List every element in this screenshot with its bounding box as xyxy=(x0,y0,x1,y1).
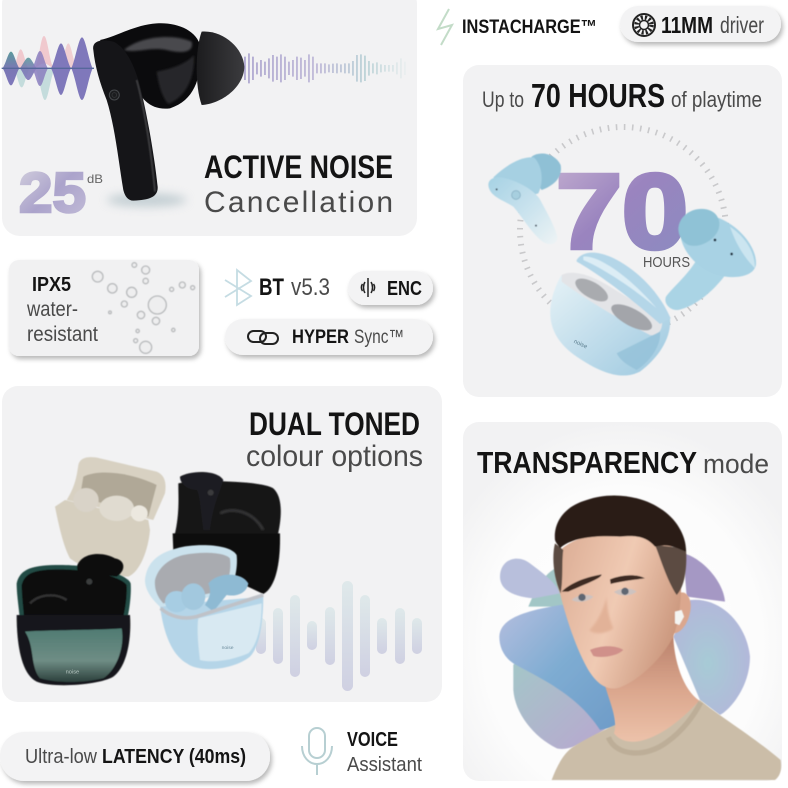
dial ticks xyxy=(520,127,726,333)
eyes xyxy=(572,588,637,602)
icon: driver xyxy=(633,14,655,36)
panel: transparency mode xyxy=(463,422,782,781)
subheading: cancellation: Cancellation xyxy=(204,186,393,219)
icon: transparent blue case xyxy=(550,253,671,376)
icon: right blue earbud xyxy=(665,209,756,310)
pill: ultra-low latency: Ultra-low xyxy=(25,746,97,768)
feature: bluetooth: v5.3 xyxy=(291,274,330,301)
feature: bluetooth xyxy=(225,270,330,305)
heading: 25 dB: 25 xyxy=(19,161,86,225)
side fade hair xyxy=(553,543,686,595)
feature: instacharge xyxy=(438,9,597,45)
sweater xyxy=(552,700,781,780)
pill: enc: ENC xyxy=(387,278,422,300)
icon: microphone xyxy=(302,728,332,775)
pill: ultra-low latency: LATENCY (40ms) xyxy=(102,746,246,768)
panel: 70 hours playtime xyxy=(463,65,782,397)
waveform: filtered sound xyxy=(245,53,405,83)
waveform: incoming noise xyxy=(2,36,94,100)
feature: instacharge: INSTACHARGE™ xyxy=(462,17,597,38)
heading: transparency mode: mode xyxy=(703,449,769,479)
icon: bluetooth xyxy=(225,270,251,305)
heading: up to 70 hours of playtime xyxy=(482,77,762,114)
feature: voice assistant: VOICE xyxy=(347,729,398,751)
big number 70: 70 xyxy=(556,153,688,271)
card: ipx5 water resistant: resistant xyxy=(27,323,98,346)
face xyxy=(554,532,681,688)
feature: voice assistant: Assistant xyxy=(347,754,422,776)
icon: black case xyxy=(173,472,281,594)
neck xyxy=(603,633,699,742)
pill: 11mm driver: 11MM xyxy=(661,12,713,38)
icon: beige case xyxy=(55,457,166,577)
ear xyxy=(673,592,691,633)
feature: bluetooth: BT xyxy=(259,274,284,301)
card: ipx5 water resistant: water- xyxy=(26,298,78,321)
icon: lightning bolt xyxy=(438,9,452,45)
heading: active noise: ACTIVE NOISE xyxy=(204,149,393,185)
pill: ultra-low latency xyxy=(0,732,270,781)
sound bars xyxy=(256,581,422,691)
nose shadow xyxy=(589,597,613,633)
hair xyxy=(555,495,686,552)
pill: hyper sync xyxy=(225,319,433,355)
icon: green case xyxy=(17,554,131,685)
pill: enc xyxy=(348,271,433,305)
eyebrows xyxy=(562,574,645,592)
logo on green case: noise xyxy=(66,670,79,676)
logo on blue case: noise xyxy=(222,645,234,651)
icon: left blue earbud xyxy=(488,154,561,244)
heading: up to 70 hours of playtime: Up to xyxy=(482,87,524,112)
pill: hyper sync: HYPER xyxy=(292,327,349,348)
heading: up to 70 hours of playtime: 70 HOURS xyxy=(531,77,665,114)
white earbud xyxy=(675,610,684,625)
pill: hyper sync: Sync™ xyxy=(354,327,404,348)
collar xyxy=(608,702,701,753)
icon: black earbud xyxy=(93,23,244,207)
heading: up to 70 hours of playtime: of playtime xyxy=(671,87,762,112)
icon: enc waves xyxy=(361,278,375,297)
heading: dual toned: DUAL TONED xyxy=(249,406,420,442)
icon: water droplets xyxy=(92,263,195,353)
card: ipx5 water resistant xyxy=(9,260,199,356)
feature: voice assistant xyxy=(302,728,422,776)
lips xyxy=(590,646,623,657)
label: hours: HOURS xyxy=(643,254,690,271)
icon: blue case xyxy=(145,545,263,669)
logo on case: noise xyxy=(572,339,589,351)
panel: dual toned colour options xyxy=(2,386,442,702)
subheading: colour options: colour options xyxy=(246,440,423,473)
gradient blobs xyxy=(499,553,750,749)
pill: 11mm driver: driver xyxy=(720,12,764,38)
pill: 11mm driver xyxy=(620,6,781,42)
portrait: man wearing earbud xyxy=(552,495,781,780)
panel: active noise cancellation xyxy=(2,0,417,236)
icon: link xyxy=(248,331,278,344)
heading: transparency mode: TRANSPARENCY xyxy=(477,445,697,480)
card: ipx5 water resistant: IPX5 xyxy=(32,274,71,296)
heading: 25 dB: dB xyxy=(87,172,103,186)
